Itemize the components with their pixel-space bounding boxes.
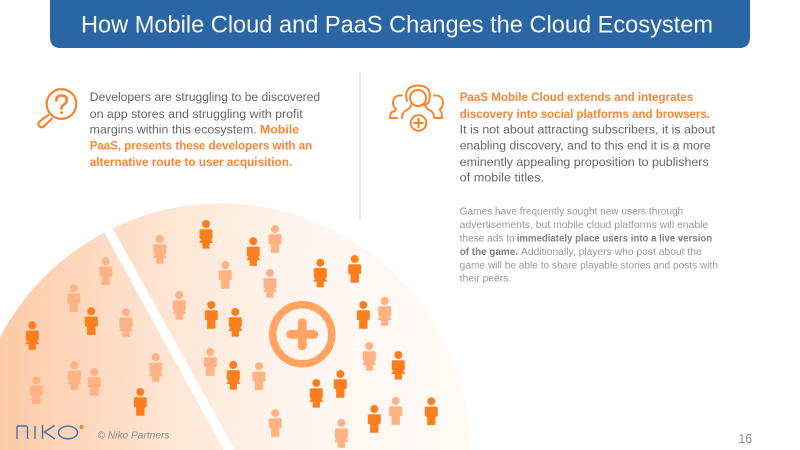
right intro text: It is not about attracting subscribers, it is about — [460, 122, 716, 136]
icon: group of people with plus — [390, 86, 443, 131]
copyright note: © Niko Partners — [98, 430, 170, 442]
left intro text — [90, 90, 320, 169]
left intro text: alternative route to user acquisition. — [90, 155, 292, 169]
small detail paragraph — [460, 206, 718, 284]
right intro text: of mobile titles. — [460, 170, 544, 184]
logo: niko — [17, 425, 84, 439]
small detail paragraph: game will be able to share playable stories and posts with — [460, 260, 718, 272]
right intro text: discovery into social platforms and browsers. — [460, 107, 710, 121]
left intro text: on app stores and struggling with profit — [90, 107, 303, 121]
small detail paragraph: immediately place users into a live version — [517, 234, 712, 244]
small detail paragraph: Additionally, players who post about the — [521, 247, 702, 258]
people crowd: right segment — [153, 220, 438, 448]
page number: 16 — [738, 432, 752, 446]
left intro text: margins within this ecosystem. — [90, 122, 257, 136]
left intro text: Mobile — [260, 122, 299, 136]
title banner — [50, 0, 750, 48]
right intro text: enabling discovery, and to this end it is a more — [460, 138, 711, 152]
icon: central plus in ring — [273, 305, 332, 364]
left intro text: Developers are struggling to be discovered — [90, 90, 320, 104]
title: How Mobile Cloud and PaaS Changes the Cloud Ecosystem — [81, 12, 713, 38]
small detail paragraph: of the game. — [460, 247, 518, 258]
small detail paragraph: these ads to — [460, 234, 515, 244]
small detail paragraph: advertisements, but mobile cloud platforms will enable — [460, 220, 709, 231]
icon: magnifying glass with question mark — [38, 89, 76, 127]
small detail paragraph: Games have frequently sought new users through — [460, 206, 683, 218]
people crowd: left segment — [25, 257, 163, 416]
divider — [359, 72, 361, 220]
segmented circle background — [0, 203, 470, 450]
left intro text: PaaS, presents these developers with an — [90, 138, 312, 152]
right intro text: PaaS Mobile Cloud extends and integrates — [460, 90, 693, 104]
right intro text: eminently appealing proposition to publishers — [460, 155, 709, 169]
small detail paragraph: their peers. — [460, 274, 511, 284]
right intro text — [460, 90, 716, 184]
